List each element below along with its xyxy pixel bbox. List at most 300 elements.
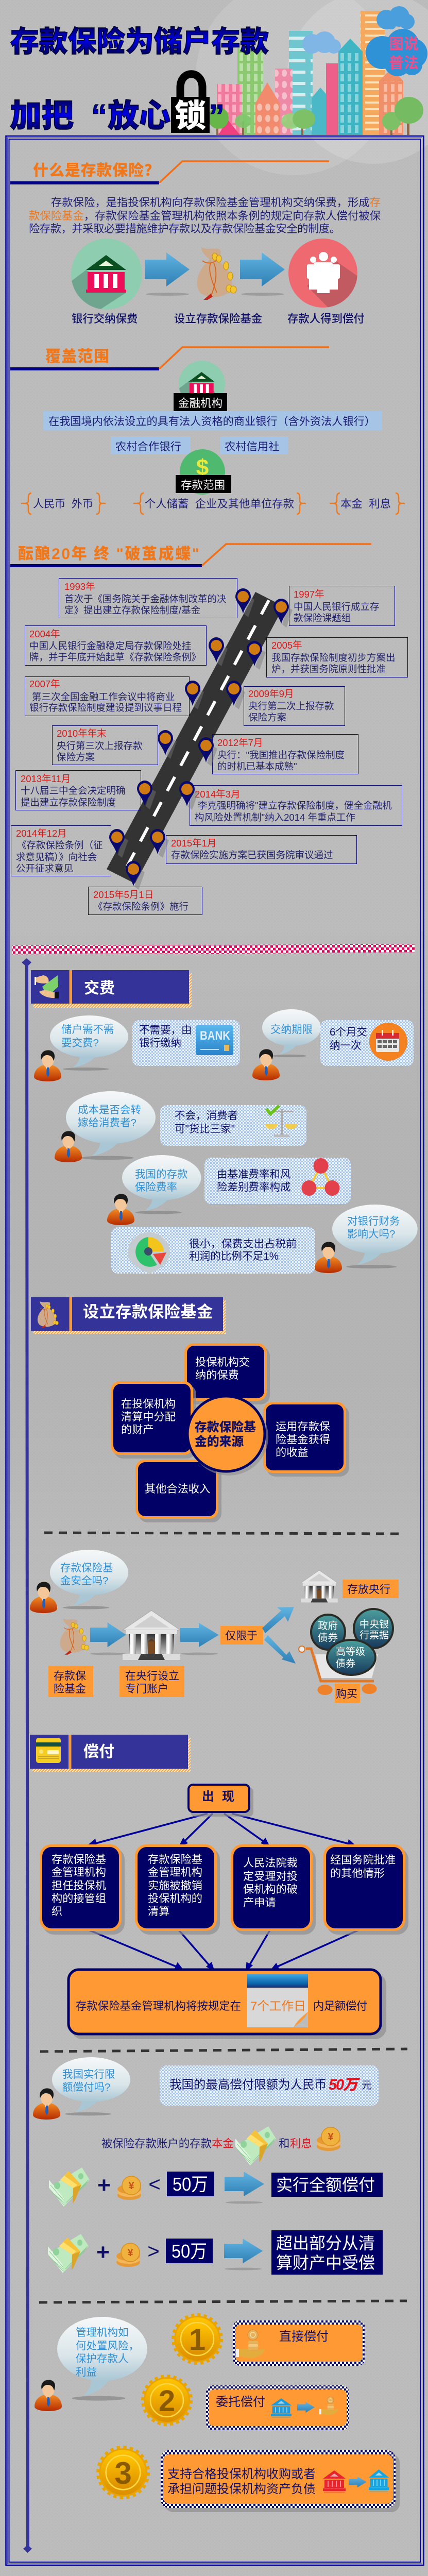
card: 其他合法收入: [135, 1460, 221, 1522]
label: commercial banks: [43, 411, 382, 430]
speech bubble: [66, 1091, 156, 1160]
heading: 什么是存款保险: 什么是存款保险？: [33, 162, 160, 179]
answer box: 利润的比例不足1%: [189, 1250, 279, 1262]
icon: card: [36, 1738, 61, 1763]
answer box: 6个月交: [330, 1026, 367, 1038]
timeline 2015 January: 存款保险实施方案已获国务院审议通过: [171, 850, 333, 860]
speech bubble: 何处置风险，: [76, 2340, 139, 2352]
icon: blue bank: [369, 2469, 389, 2492]
card: 接管组织: 金管理机构: [52, 1866, 106, 1878]
timeline 2015 January: [166, 836, 356, 863]
card: 投保机构交纳的保费: [184, 1343, 270, 1404]
bond: 中央银行票据: 中央银: [359, 1619, 389, 1630]
timeline 2012: 的时机已基本成熟": [217, 761, 297, 772]
timeline 2004: 牌，并于年底开始起草《存款保险条例》: [29, 652, 201, 663]
answer box: 银行缴纳: [139, 1037, 181, 1049]
label: commercial banks: 在我国境内依法设立的具有法人资格的商业银行（含外资法人银行）: [48, 415, 375, 428]
speech bubble: 我国的存款: [135, 1168, 187, 1180]
icon: coins: [317, 2127, 340, 2151]
panel: coverage: [10, 347, 405, 514]
timeline 2010: 2010年年末: [57, 728, 107, 739]
badge 2: 2: [159, 2384, 175, 2418]
icon: man: [252, 1049, 280, 1080]
icon: man: [55, 1131, 82, 1162]
timeline 2005: [267, 638, 408, 677]
card: 基金收益: [263, 1402, 349, 1477]
timeline 2009: 保险方案: [248, 712, 286, 723]
section header: 设立存款保险基金: [31, 1297, 226, 1334]
card: 基金收益: 险基金获得: [276, 1433, 330, 1446]
card: 接管组织: [40, 1844, 125, 1935]
section header: 设立存款保险基金: 设立存款保险基金: [83, 1303, 213, 1321]
icon: money stack: [235, 2126, 276, 2165]
method 3: 收购承担: [98, 2448, 400, 2512]
icon: blue bank: [271, 2398, 292, 2418]
badge: 图说普法 cloud: 普法: [389, 55, 419, 72]
timeline 1993: [59, 578, 237, 618]
text block: definition: 存款保险，是指投保机构向存款保险基金管理机构交纳保费，形成存: [51, 196, 381, 209]
speech bubble: 我国实行限: [62, 2069, 115, 2080]
badge 3: 3: [114, 2456, 132, 2490]
answer box: [111, 1227, 315, 1274]
section header: 交费: 交费: [84, 980, 115, 997]
icon: depositors in red circle: [288, 239, 361, 309]
map pins: [109, 588, 293, 890]
answer box: 很小，保费支出占税前: [189, 1238, 297, 1250]
timeline 2012: 2012年7月: [217, 737, 263, 748]
Q&A: payment period: [252, 1009, 414, 1080]
timeline 2014 March: [190, 785, 402, 825]
Q&A: cost transfer: [55, 1091, 306, 1162]
timeline 2013: 十八届三中全会决定明确: [21, 785, 126, 796]
timeline 2014 March: 李克强明确将"建立存款保险制度，健全金融机: [198, 800, 392, 811]
card: 接管组织: 织: [52, 1905, 62, 1918]
card: 其他情形: [323, 1844, 408, 1935]
flow labels: 存款人得到偿付: [287, 313, 365, 325]
timeline 2013: 提出建立存款保险制度: [21, 797, 116, 808]
checker divider band: [12, 944, 415, 954]
badge: 图说普法 cloud: 图说: [389, 36, 419, 53]
timeline 2014 December: 《存款保险条例（征: [17, 840, 103, 851]
card: 撤销清算: 存款保险基: [148, 1853, 202, 1866]
speech bubble: 保险费率: [135, 1181, 177, 1193]
card: 投保机构交纳的保费: 投保机构交: [195, 1356, 250, 1368]
heading: 酝酿20年: 酝酿20年 终 "破茧成蝶": [18, 545, 199, 563]
box: [161, 2450, 400, 2512]
speech bubble: 交纳期限: [270, 1024, 313, 1036]
text block: definition: [29, 196, 381, 235]
box: 实行全额偿付: 实行全额偿付: [276, 2176, 375, 2194]
arrow: [240, 252, 285, 296]
icon: financial institution: [179, 361, 225, 393]
timeline 1993: 首次于《国务院关于金融体制改革的决: [64, 594, 227, 604]
bond: 政府债券: [311, 1615, 345, 1650]
timeline 2004: 2004年: [29, 629, 60, 639]
label: 存款保险基金: [48, 1666, 93, 1697]
label: 专门账户: 专门账户: [125, 1683, 168, 1695]
card: 接管组织: 担任投保机: [52, 1879, 106, 1892]
badge 3: [98, 2448, 148, 2497]
answer box: [320, 1020, 414, 1066]
timeline 2014 March: 2014年3月: [195, 789, 240, 800]
label: 存款保险基金: 存款保: [54, 1670, 86, 1682]
heading: 什么是存款保险: [10, 161, 329, 184]
card: 其他合法收入: 其他合法收入: [145, 1483, 210, 1495]
method 1: 直接偿付: [174, 2315, 365, 2366]
title: 加把: [10, 98, 74, 134]
timeline 2007: 第三次全国金融工作会议中将商业: [32, 691, 175, 702]
badge 2: [143, 2377, 191, 2424]
timeline 2013: 2013年11月: [21, 773, 71, 784]
label: 存款范围: 存款范围: [181, 479, 225, 492]
timeline 2007: 银行存款保险制度建设提到议事日程: [29, 702, 182, 713]
speech bubble: 利益: [76, 2366, 97, 2378]
equation: below 500k: [49, 2167, 383, 2207]
group: deposit type: 个人储蓄 企业及其他单位存款: [145, 498, 294, 510]
title: 锁: [175, 98, 206, 134]
arrow: [90, 1622, 126, 1655]
card: 接管组织: 存款保险基: [52, 1853, 106, 1866]
arrow: [145, 252, 190, 296]
speech bubble: 对银行财务: [347, 1215, 400, 1227]
paper note: [247, 1974, 308, 2027]
timeline 2009: 央行第二次上报存款: [248, 701, 334, 711]
flow labels: 银行交纳保费: [72, 313, 138, 325]
Q&A: is the fund safe: [30, 1550, 399, 1703]
card: 撤销清算: [135, 1844, 220, 1935]
box: 出现: [189, 1785, 253, 1817]
timeline 2009: [244, 686, 345, 725]
clouds: [376, 6, 415, 29]
group: currency: 人民币 外币: [33, 498, 93, 510]
box: 超出部分: 超出部分从清: [276, 2234, 375, 2252]
icon: man: [33, 2088, 60, 2120]
text: principal plus interest: 和: [279, 2138, 289, 2150]
icon: bank card: BANK: [200, 1029, 231, 1043]
arrow: [297, 2402, 315, 2413]
timeline 2005: 炉，并获国务院原则性批准: [271, 664, 386, 674]
title: 放心: [108, 98, 170, 134]
timeline 1993: 1993年: [64, 581, 95, 592]
timeline 2014 December: 2014年12月: [16, 828, 67, 839]
timeline 1997: 中国人民银行成立存: [294, 601, 380, 612]
center ellipse: [187, 1396, 268, 1476]
Q&A: payout limit: [33, 2057, 379, 2120]
section header: 偿付: 偿付: [83, 1743, 114, 1760]
icon: dollar: $: [196, 455, 209, 480]
answer box: 可"货比三家": [175, 1123, 235, 1135]
icon: bank in green circle: [71, 239, 142, 310]
box: 50万: 50万: [172, 2241, 207, 2262]
heading: 覆盖范围: 覆盖范围: [45, 348, 109, 365]
icon: man: [107, 1194, 134, 1225]
arrow up-right: [262, 1607, 294, 1633]
speech bubble: 储户需不需: [61, 1024, 114, 1036]
card: 撤销清算: 实施被撤销: [148, 1879, 202, 1892]
label: 存款保险基金: 险基金: [54, 1683, 86, 1695]
timeline 2010: [53, 725, 158, 765]
icon: bank card: [196, 1025, 233, 1055]
section header: 偿付: [30, 1735, 191, 1772]
diagram: payout triggers: [40, 1785, 408, 2039]
label: 农村合作银行: [111, 436, 191, 454]
speech bubble: [122, 1155, 201, 1214]
speech bubble: 影响大吗?: [347, 1228, 395, 1240]
timeline 2015 May: 《存款保险条例》施行: [93, 901, 189, 912]
badge: 图说普法 cloud: [366, 29, 427, 76]
Q&A: premium rate: [107, 1155, 351, 1225]
bond: 政府债券: 政府: [318, 1620, 338, 1632]
icon: money bag: [60, 1618, 89, 1655]
icon: hand and coins: [236, 2330, 264, 2358]
panel: twenty year timeline: [10, 544, 408, 915]
card: 基金收益: 运用存款保: [276, 1420, 330, 1433]
timeline 1997: 1997年: [294, 589, 324, 600]
timeline 2015 May: 2015年5月1日: [93, 889, 153, 900]
timeline 1993: 定》提出建立存款保险制度/基金: [64, 605, 200, 616]
icon: shopping cart with bonds: [299, 1609, 393, 1703]
answer box: 不会，消费者: [175, 1110, 238, 1122]
timeline 2005: 2005年: [271, 640, 302, 651]
Q&A: does the depositor pay: [34, 1015, 240, 1081]
center ellipse: 金的来源: [195, 1434, 244, 1449]
answer box: 50万: [329, 2077, 361, 2093]
vertical spine: [22, 958, 32, 2553]
flow labels: 设立存款保险基金: [174, 313, 262, 325]
answer box: 由基准费率和风: [217, 1168, 290, 1180]
speech bubble: [50, 1015, 128, 1071]
text: principal plus interest: [101, 2126, 340, 2165]
icon: hands and money: [35, 975, 59, 998]
icon: small central bank: [301, 1570, 338, 1602]
icon: central bank: [123, 1611, 180, 1660]
box: [233, 2320, 365, 2366]
icon: money bag: [38, 1301, 58, 1328]
card: 破产申请: 保机构的破: [243, 1883, 298, 1895]
label: 购买: 购买: [336, 1688, 357, 1700]
box: [206, 2385, 349, 2430]
speech bubble: 要交费?: [61, 1037, 99, 1049]
arrow: [224, 2239, 263, 2270]
timeline 2004: [25, 625, 206, 666]
answer box: 险差别费率构成: [217, 1181, 290, 1193]
speech bubble: [52, 2057, 130, 2115]
icon: man: [30, 1582, 57, 1613]
box: 超出部分: [271, 2230, 383, 2275]
equation: above 500k: +: [96, 2240, 110, 2265]
answer box: [160, 2065, 379, 2106]
group: deposit type: [133, 493, 306, 514]
arrow: [349, 2477, 367, 2487]
speech bubble: [57, 2317, 147, 2401]
heading: 覆盖范围: [10, 347, 329, 370]
timeline 2014 December: [11, 825, 111, 876]
answer box: [204, 1158, 351, 1204]
group: principal and interest: 本金 利息: [340, 498, 391, 510]
card: 破产申请: 产申请: [243, 1896, 276, 1909]
icon: scales: [265, 1106, 297, 1137]
badge 1: 1: [189, 2323, 206, 2357]
timeline 2014 December: 公开征求意见: [16, 863, 73, 874]
timeline 2007: 2007年: [29, 679, 60, 689]
title: 存款保险为储户存款: [10, 25, 269, 58]
box: 委托偿付: [216, 2395, 265, 2409]
timeline 1997: 款保险课题组: [294, 613, 351, 623]
road: [107, 592, 284, 884]
speech bubble: 保护存款人: [76, 2353, 129, 2365]
Q&A: impact on banks: [111, 1205, 418, 1274]
speech bubble: 嫁给消费者?: [78, 1117, 136, 1129]
label: 金融机构: 金融机构: [178, 397, 222, 410]
speech bubble: [332, 1205, 418, 1268]
card: 破产申请: 定受理对投: [243, 1870, 298, 1883]
arrow: [180, 1623, 219, 1655]
timeline 2013: [15, 771, 141, 810]
card: 破产申请: 人民法院裁: [243, 1857, 298, 1869]
card: 破产申请: [231, 1844, 316, 1935]
title: [10, 25, 269, 134]
box: 出现: 出 现: [202, 1790, 234, 1804]
group: currency: [21, 493, 106, 514]
card: 清算财产: 的财产: [121, 1423, 154, 1436]
icon: man: [315, 1242, 342, 1273]
diagram: fund sources: [111, 1343, 349, 1522]
timeline 2012: 央行："我国推出存款保险制度: [217, 750, 345, 760]
icon: red bank: [323, 2470, 346, 2493]
header illustration: city skyline: [196, 0, 428, 175]
card: 其他情形: 的其他情形: [330, 1867, 385, 1879]
bond: 高等级债券: [327, 1640, 375, 1675]
icon: man: [34, 1050, 61, 1081]
timeline 2012: [212, 735, 358, 774]
heading: 酝酿20年: [10, 544, 371, 567]
box: seven working days: 存款保险基金管理机构将按规定在: [76, 2000, 241, 2012]
answer box: 不需要，由: [139, 1024, 192, 1036]
text block: definition: 险存款，并采取必要措施维护存款以及存款保险基金安全的制度。: [29, 223, 340, 235]
equation: above 500k: >: [147, 2240, 160, 2263]
card: 其他情形: 经国务院批准: [330, 1854, 396, 1866]
text: principal plus interest: 本金: [212, 2138, 234, 2150]
title: ”: [209, 98, 225, 134]
box: seven working days: 7个工作日: [250, 1999, 306, 2013]
timeline 2015 May: [89, 887, 202, 915]
speech bubble: 金安全吗?: [60, 1575, 108, 1587]
timeline 2014 December: 求意见稿）》向社会: [16, 852, 97, 862]
panel: what is deposit insurance: [10, 161, 381, 325]
arrow down-right: [264, 1635, 296, 1664]
card: 撤销清算: 金管理机构: [148, 1866, 202, 1878]
card: 接管组织: 构的接管组: [52, 1892, 106, 1905]
speech bubble: 成本是否会转: [78, 1104, 141, 1116]
arrows from 出现: [88, 1814, 360, 1970]
label: 金融机构: [174, 393, 227, 411]
box: 实行全额偿付: [271, 2173, 383, 2197]
bond: 中央银行票据: 行票据: [359, 1630, 389, 1641]
answer box: 纳一次: [330, 1040, 362, 1052]
answer box: [132, 1020, 240, 1066]
card: 撤销清算: 清算: [148, 1905, 169, 1918]
label: 仅限于: 仅限于: [225, 1630, 258, 1642]
icon: network nodes: [302, 1158, 340, 1196]
timeline 2010: 央行第三次上报存款: [57, 740, 143, 751]
box: 超出部分: 算财产中受偿: [276, 2253, 375, 2272]
speech bubble: [262, 1009, 321, 1057]
group: principal and interest: [330, 493, 405, 514]
answer box: 我国的最高偿付限额为人民币: [169, 2078, 327, 2091]
badge 1: [174, 2315, 221, 2363]
timeline 2004: 中国人民银行金融稳定局存款保险处挂: [29, 640, 192, 651]
label: 专门账户: [119, 1666, 184, 1697]
timeline 2010: 保险方案: [57, 752, 95, 762]
label: 购买: [335, 1684, 360, 1703]
card: 清算财产: [111, 1381, 196, 1459]
text: principal plus interest: 被保险存款账户的存款: [101, 2138, 212, 2150]
speech bubble: 管理机构如: [76, 2327, 129, 2338]
timeline 2009: 2009年9月: [248, 688, 294, 699]
equation: above 500k: [48, 2230, 383, 2275]
box: seven working days: 内足额偿付: [313, 2000, 367, 2012]
card: 撤销清算: 投保机构的: [148, 1892, 202, 1905]
label: 存放央行: [343, 1580, 399, 1598]
icon: hand and coins: [319, 2397, 338, 2415]
icon: pie chart: [128, 1232, 170, 1274]
equation: below 500k: +: [97, 2173, 111, 2198]
bond: 高等级债券: 债券: [336, 1658, 355, 1669]
box: 承担问题投保机构资产负债: [167, 2482, 316, 2496]
label: 存款范围: [176, 475, 231, 493]
section header: 交费: [31, 970, 192, 1008]
timeline 1997: [289, 586, 395, 625]
label: 存放央行: 存放央行: [347, 1584, 390, 1596]
Q&A: risk disposal: [35, 2317, 147, 2411]
icon: man: [35, 2380, 62, 2411]
label: 专门账户: 在央行设立: [125, 1670, 179, 1682]
text: principal plus interest: 利息: [290, 2138, 312, 2150]
equation: below 500k: <: [148, 2173, 161, 2196]
bond: 中央银行票据: [354, 1609, 393, 1648]
trees: [208, 97, 423, 135]
label: 仅限于: [220, 1626, 263, 1645]
box: 支持合格投保机构收购或者: [167, 2467, 316, 2481]
box: seven working days: [69, 1970, 386, 2039]
text block: definition: 款保险基金，存款保险基金管理机构依照本条例的规定向存款人偿付被保: [29, 210, 381, 222]
card: 基金收益: 的收益: [276, 1446, 309, 1459]
timeline 2014 March: 构风险处置机制"纳入2014 年重点工作: [195, 812, 355, 823]
speech bubble: [50, 1550, 128, 1609]
timeline 2015 January: 2015年1月: [171, 838, 216, 849]
speech bubble: 存款保险基: [60, 1562, 113, 1574]
bond: 高等级债券: 高等级: [336, 1646, 365, 1657]
speech bubble: 额偿付吗?: [62, 2081, 110, 2093]
timeline 2007: [25, 677, 190, 716]
label: 农村信用社: 农村信用社: [225, 440, 279, 453]
card: 清算财产: 清算中分配: [121, 1411, 176, 1423]
icon: money bag: [197, 247, 236, 300]
box: 直接偿付: [279, 2330, 329, 2344]
card: 投保机构交纳的保费: 纳的保费: [195, 1369, 239, 1381]
timeline 2005: 我国存款保险制度初步方案出: [271, 652, 396, 663]
card: 清算财产: 在投保机构: [121, 1398, 176, 1410]
answer box: [160, 1105, 306, 1146]
icon: dollar: [180, 449, 225, 495]
box: 50万: 50万: [173, 2174, 208, 2195]
center ellipse: 存款保险基: [195, 1420, 256, 1434]
icon: calendar: [369, 1023, 407, 1061]
flow labels: [72, 313, 365, 325]
title: “: [91, 98, 107, 134]
method 2: 委托偿付: [143, 2377, 349, 2430]
label: 农村合作银行: 农村合作银行: [115, 440, 181, 453]
